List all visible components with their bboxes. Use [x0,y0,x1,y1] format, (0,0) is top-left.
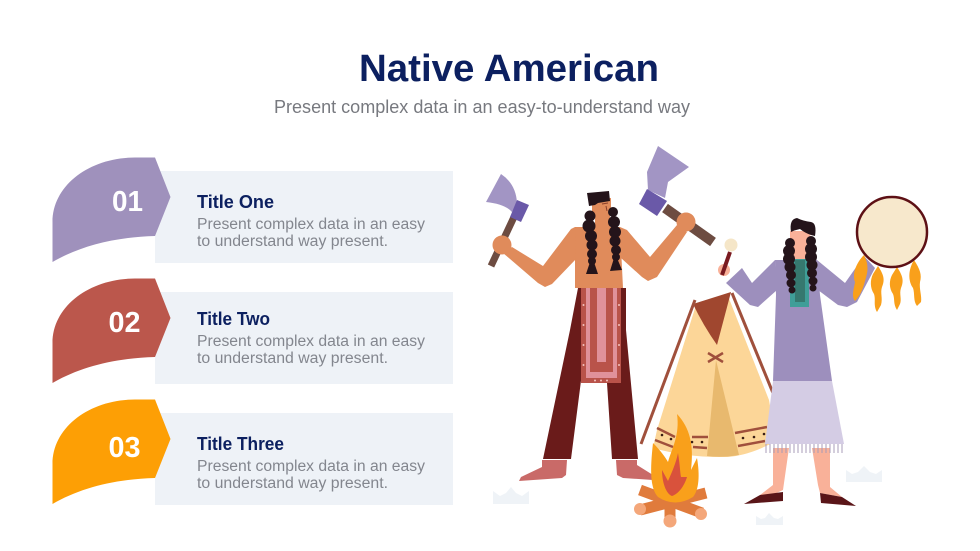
subtitle: Present complex data in an easy-to-understand way [274,97,690,117]
man with axes [486,146,713,481]
right axe [639,146,713,242]
left axe [486,174,529,266]
description one: Present complex data in an easy [197,216,425,233]
woman with drum [718,197,927,506]
heading three: Title Three [197,434,284,454]
description two: Present complex data in an easy [197,333,425,350]
skirt [765,381,844,453]
number 02: 02 [108,307,140,339]
head [790,218,816,262]
description two: to understand way present. [197,350,388,367]
heading one: Title One [197,192,274,212]
number 01: 01 [112,186,143,218]
shoes [744,492,856,506]
rattle and hand [718,238,738,276]
campfire [634,414,707,528]
apron [581,288,621,383]
inner flame [662,453,687,496]
drum feathers [853,255,921,312]
tipi [641,292,776,457]
logs [640,490,706,521]
braids [582,207,622,274]
panel background two [155,292,453,384]
panel background three [155,413,453,505]
feet [519,460,653,481]
dress and sleeves [726,256,875,381]
number badge two [52,278,170,383]
grass tufts [493,466,882,525]
head and hair [587,191,611,222]
legs [760,448,842,497]
title: Native American [359,48,659,90]
curly hair [783,236,818,294]
number badge three [52,400,170,504]
necklace [790,259,809,307]
flame [651,414,699,502]
torso and arms [492,205,696,288]
panel background one [155,171,453,263]
panel: item two [52,278,453,384]
heading two: Title Two [197,309,270,329]
panel: item three [52,400,453,505]
drum [857,197,927,267]
description three: to understand way present. [197,475,388,492]
trousers [543,288,638,459]
illustration: camp scene [486,146,927,528]
number 03: 03 [108,432,140,464]
number badge one [52,158,170,262]
description one: to understand way present. [197,233,388,250]
panel: item one [52,158,453,263]
description three: Present complex data in an easy [197,458,425,475]
